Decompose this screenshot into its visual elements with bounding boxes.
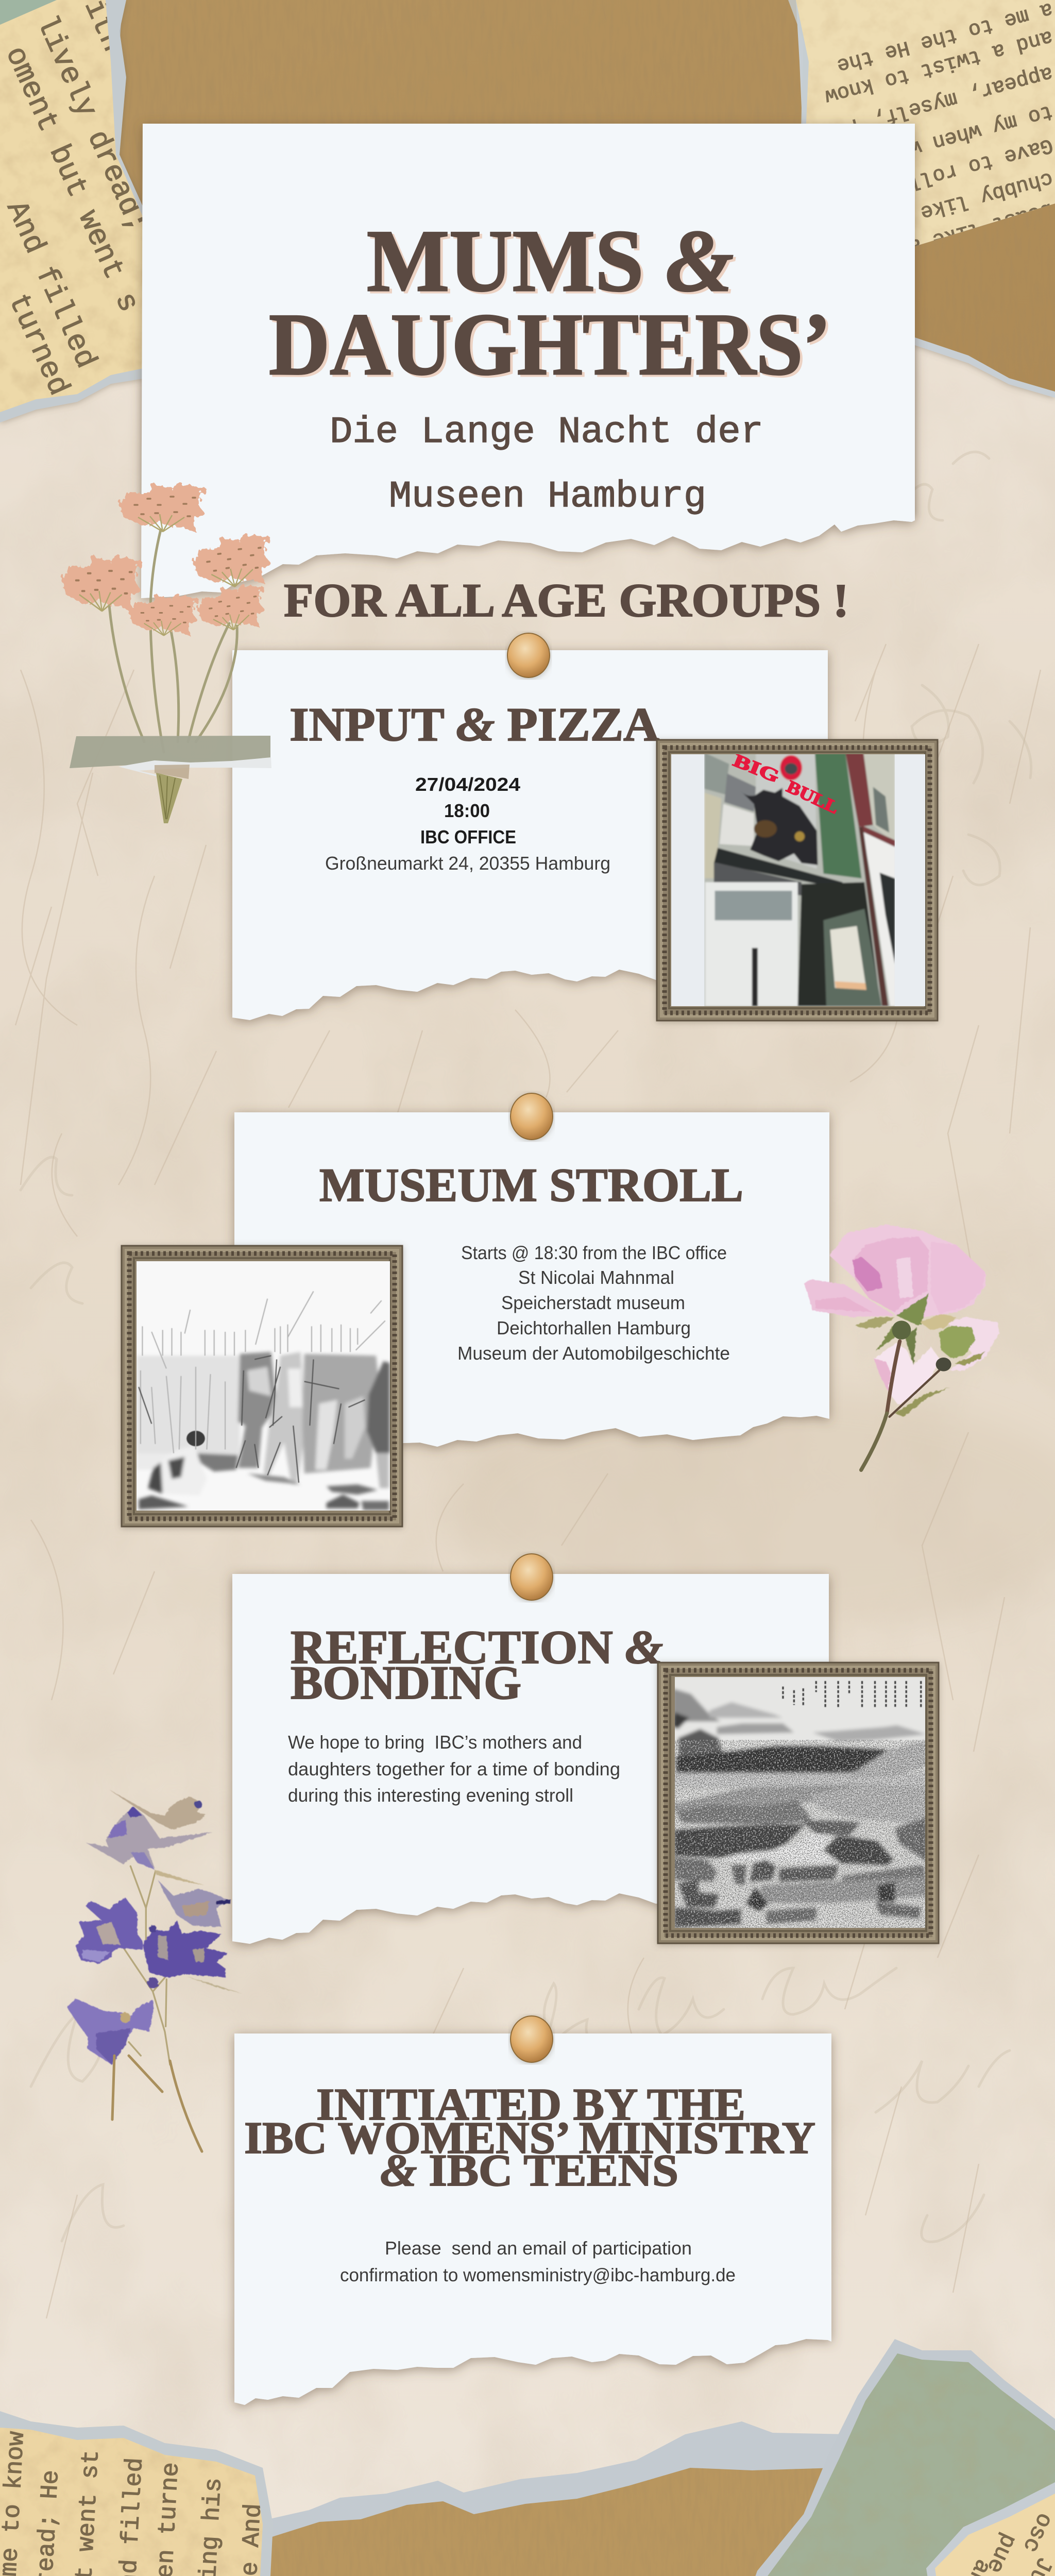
heading: [244, 2080, 815, 2196]
heading: MUSEUM STROLL: [319, 1159, 743, 1211]
torn paper: top kraft: [114, 0, 1055, 515]
torn paper: top-right newspaper: Gave to roll: [906, 132, 1055, 193]
torn paper: top-right newspaper: and a twist to know: [822, 24, 1055, 108]
title: MUMS &: [367, 212, 734, 310]
card paper: [232, 650, 828, 1020]
torn paper: bottom-left newspaper: [0, 2411, 273, 2576]
pin 1: [507, 633, 550, 677]
torn paper: top-left newspaper: lively dread;: [29, 11, 154, 238]
torn paper: top-right newspaper: [788, 0, 1055, 258]
event details: [325, 774, 610, 874]
contact text: [340, 2238, 736, 2285]
torn paper: bottom-right newspaper: pue: [981, 2529, 1022, 2576]
description: [288, 1732, 620, 1806]
framed photo: building with bull sign: [657, 740, 938, 1021]
header note paper: [141, 124, 915, 598]
description: daughters together for a time of bonding: [288, 1758, 620, 1780]
pin 3: [511, 1554, 553, 1600]
flower: pink rose: [804, 1225, 999, 1470]
heading: [291, 1621, 663, 1709]
framed photo: building with bull sign: BULL: [784, 777, 842, 818]
torn paper: bottom-right newspaper: [926, 2482, 1055, 2576]
audience heading: FOR ALL AGE GROUPS !: [284, 574, 849, 626]
heading: IBC WOMENS’ MINISTRY: [244, 2113, 815, 2163]
event details: Großneumarkt 24, 20355 Hamburg: [325, 853, 610, 874]
description: during this interesting evening stroll: [288, 1785, 573, 1806]
panel: initiated by: [234, 2033, 831, 2405]
panel: input and pizza: [232, 650, 828, 1020]
contact text: Please send an email of participation: [385, 2238, 692, 2259]
framed etching: soldiers: [122, 1246, 402, 1527]
contact text: confirmation to womensministry@ibc-hamburg.de: [340, 2264, 736, 2285]
event details: 18:00: [444, 800, 490, 821]
torn paper: top-left newspaper: turned: [1, 289, 75, 401]
title: DAUGHTERS’: [269, 296, 831, 394]
stroll stops: [457, 1242, 730, 1364]
title: [269, 212, 831, 394]
card paper: [234, 2033, 831, 2405]
panel: museum stroll: [234, 1112, 829, 1453]
heading: BONDING: [291, 1656, 521, 1709]
pin 2: [511, 1093, 553, 1140]
stroll stops: Speicherstadt museum: [501, 1292, 685, 1313]
card paper: [232, 1574, 829, 1944]
stroll stops: St Nicolai Mahnmal: [518, 1267, 674, 1288]
card paper: [234, 1112, 829, 1453]
torn paper: top-right newspaper: chubby like a: [894, 166, 1055, 230]
washi tape: [70, 736, 271, 781]
subtitle: Die Lange Nacht der: [330, 411, 763, 453]
pin 4: [511, 2016, 553, 2062]
torn paper: top-left newspaper: [0, 0, 154, 422]
flower: purple larkspur: [67, 1790, 242, 2151]
heading: & IBC TEENS: [380, 2146, 678, 2196]
torn paper: top-right newspaper: beast like a: [906, 197, 1055, 258]
heading: INITIATED BY THE: [316, 2080, 745, 2130]
torn paper: top-right newspaper: to my when wt: [894, 99, 1055, 163]
framed photo: building with bull sign: BIG: [730, 750, 782, 787]
torn paper: green piece: [734, 2339, 1055, 2576]
subtitle: Museen Hamburg: [389, 476, 706, 518]
heading: INPUT & PIZZA: [290, 698, 659, 751]
torn paper: top-left newspaper: And filled: [0, 196, 103, 374]
panel: reflection and bonding: [232, 1574, 829, 1944]
subtitle: [330, 411, 763, 518]
event details: 27/04/2024: [415, 774, 520, 795]
description: We hope to bring IBC’s mothers and: [288, 1732, 582, 1753]
torn paper: top-right newspaper: appear, myself, Y of: [810, 60, 1055, 147]
framed painting: landscape with crowds: [658, 1663, 939, 1943]
stroll stops: Museum der Automobilgeschichte: [457, 1343, 730, 1364]
flower: dried peach lace: [62, 484, 274, 823]
event details: IBC OFFICE: [420, 826, 516, 848]
torn paper: top-left newspaper: oment but went s: [0, 42, 145, 317]
torn paper: bottom kraft: [258, 2421, 850, 2576]
stroll stops: Starts @ 18:30 from the IBC office: [461, 1242, 727, 1263]
stroll stops: Deichtorhallen Hamburg: [497, 1317, 691, 1338]
heading: REFLECTION &: [291, 1621, 663, 1673]
